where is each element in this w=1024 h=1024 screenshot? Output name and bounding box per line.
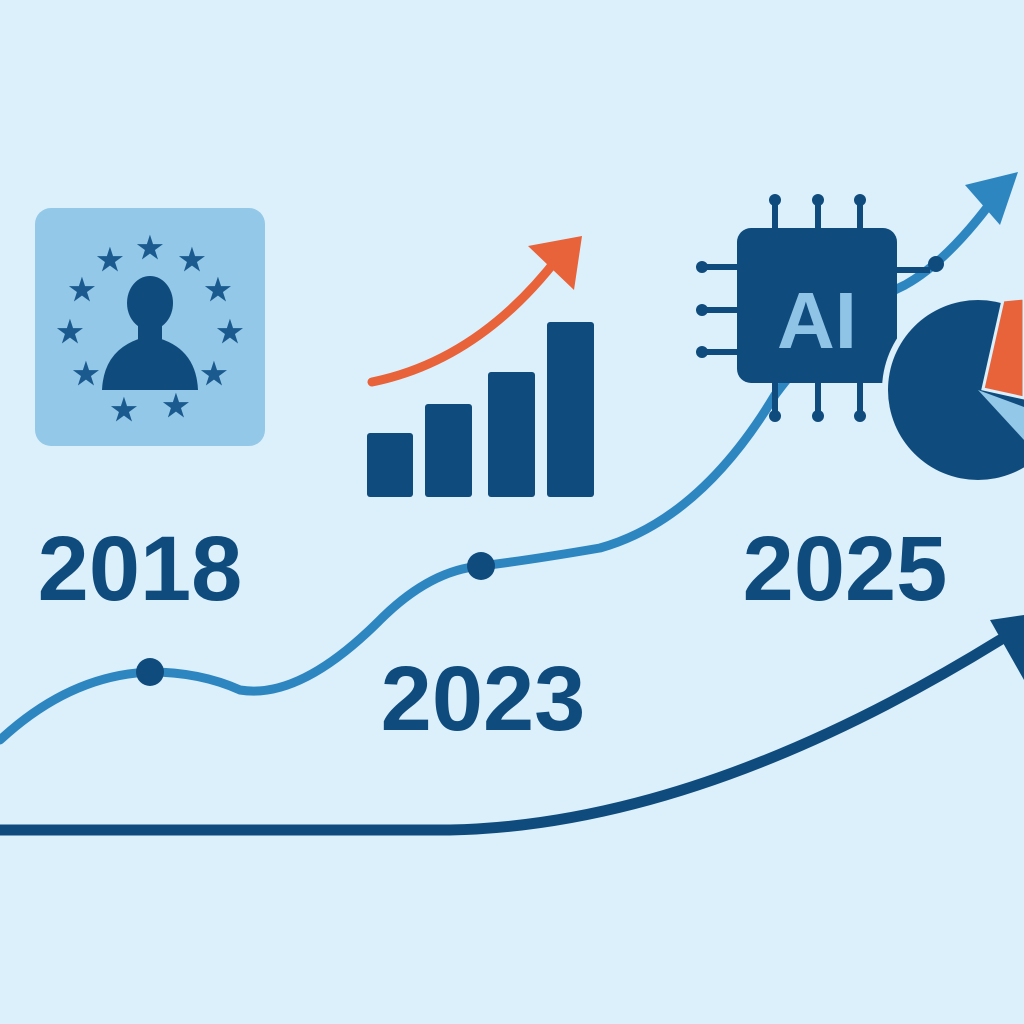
pie chart <box>882 294 1024 486</box>
icon: EU privacy person: ★ <box>179 244 206 277</box>
label: 2018: 2018 <box>38 518 242 620</box>
icon: EU privacy person: ★ <box>137 232 164 265</box>
bar chart <box>367 322 594 497</box>
icon: EU privacy person: ★ <box>201 358 228 391</box>
icon: EU privacy person: ★ <box>57 316 84 349</box>
line: wavy timeline <box>0 172 1018 740</box>
icon: EU privacy person: ★ <box>73 358 100 391</box>
icon: EU privacy person: ★ <box>111 394 138 427</box>
icon: EU privacy person <box>35 208 265 446</box>
icon: EU privacy person: ★ <box>205 274 232 307</box>
arrow: orange growth <box>372 236 582 382</box>
icon: EU privacy person: ★ <box>69 274 96 307</box>
icon: AI chip <box>696 194 930 422</box>
icon: EU privacy person: ★ <box>217 316 244 349</box>
label: 2023: 2023 <box>381 648 585 750</box>
icon: AI chip: AI <box>777 276 857 365</box>
icon: EU privacy person: ★ <box>97 244 124 277</box>
icon: EU privacy person: ★ <box>163 390 190 423</box>
arrow: bottom trend <box>0 615 1024 830</box>
label: 2025: 2025 <box>743 518 947 620</box>
